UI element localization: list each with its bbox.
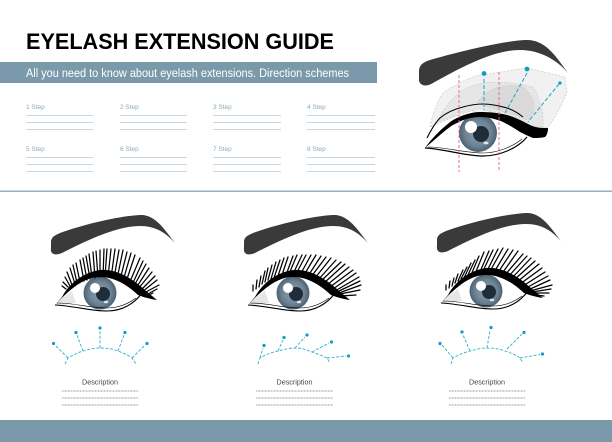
step 2	[120, 104, 187, 130]
lower lid	[425, 137, 527, 156]
pink guide lines	[459, 72, 499, 172]
direction scheme 3	[438, 326, 544, 364]
step 4: 4 Step	[307, 104, 326, 111]
bottom bar	[0, 420, 612, 442]
description 2	[256, 378, 333, 405]
eyebrow	[419, 40, 568, 85]
step 8: 8 Step	[307, 146, 326, 153]
divider	[0, 190, 612, 192]
eyebrow	[244, 215, 368, 254]
lashes	[446, 248, 552, 296]
subtitle banner	[0, 62, 377, 83]
step 3	[213, 104, 281, 130]
step 7	[213, 146, 281, 172]
step 3: 3 Step	[213, 104, 232, 111]
step 4	[307, 104, 375, 130]
step 1: 1 Step	[26, 104, 45, 111]
description 3	[449, 378, 525, 405]
eyelid zones	[430, 68, 567, 132]
eye 2: cat-eye lashes	[244, 215, 368, 311]
eye 3: open-eye lashes	[437, 213, 561, 309]
direction scheme 2	[258, 333, 350, 364]
direction scheme 1	[52, 326, 149, 364]
title: EYELASH EXTENSION GUIDE	[26, 29, 334, 54]
description 1	[62, 378, 138, 405]
step 5	[26, 146, 93, 172]
step 6	[120, 146, 187, 172]
step 7: 7 Step	[213, 146, 232, 153]
eye 1: classic lashes	[51, 215, 175, 311]
eye white	[425, 116, 530, 156]
subtitle banner: All you need to know about eyelash extensions. Direction schemes	[26, 66, 349, 80]
guide eye diagram	[419, 40, 568, 172]
step 1	[26, 104, 93, 130]
eye	[55, 270, 157, 311]
crease line	[427, 104, 523, 138]
iris	[459, 114, 497, 152]
description 2: Description	[277, 378, 312, 386]
eye	[248, 270, 350, 311]
lashes	[253, 255, 361, 296]
eyebrow	[437, 213, 561, 252]
upper lid and wing	[425, 112, 548, 148]
description 3: Description	[469, 378, 505, 386]
eyebrow	[51, 215, 175, 254]
description 1: Description	[82, 378, 118, 386]
step 5: 5 Step	[26, 146, 45, 153]
blue direction arrows	[482, 67, 562, 122]
eye	[441, 268, 543, 309]
step 8	[307, 146, 375, 172]
step 2: 2 Step	[120, 104, 139, 111]
lashes	[62, 249, 159, 296]
step 6: 6 Step	[120, 146, 139, 153]
